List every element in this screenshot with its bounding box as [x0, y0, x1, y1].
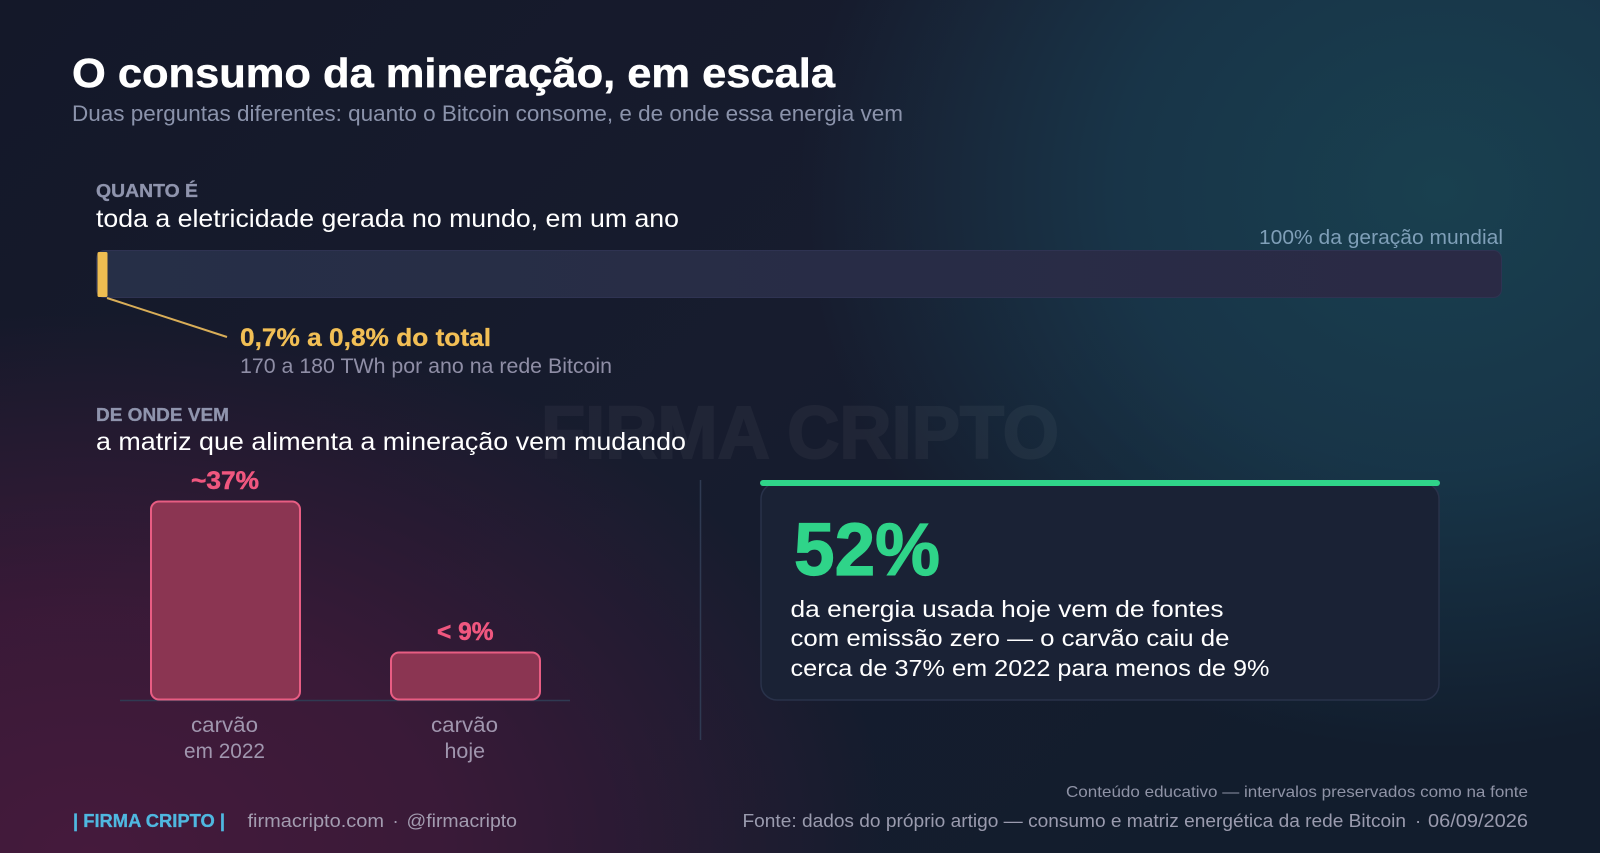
footer links: firmacripto.com [248, 810, 384, 831]
section label: de onde vem: DE ONDE VEM [96, 404, 229, 425]
axis label: in 2022: em 2022 [184, 740, 265, 763]
bar: world generation [96, 250, 1502, 298]
bar: coal 2022 [151, 502, 300, 700]
title: O consumo da mineração, em escala [72, 50, 836, 96]
scale label: 100% da geração mundial [1259, 227, 1503, 249]
disclaimer: Conteúdo educativo — intervalos preservados como na fonte [1066, 784, 1528, 801]
footer links [248, 810, 517, 831]
section heading: energy mix: a matriz que alimenta a mineração vem mudando [96, 428, 686, 456]
axis label: coal 2022: carvão [191, 714, 258, 737]
axis label: today: hoje [444, 740, 485, 763]
big number: 52% [794, 508, 940, 591]
section label: quanto é: QUANTO É [96, 180, 198, 201]
card text [790, 596, 1270, 681]
card accent bar [760, 480, 1440, 486]
footer links: @firmacripto [406, 810, 517, 831]
leader line [107, 298, 227, 337]
footer brand: | FIRMA CRIPTO | [73, 810, 225, 831]
panel: 52% callout card [760, 480, 1440, 700]
axis label: coal today: carvão [431, 714, 498, 737]
value: coal today: < 9% [437, 618, 494, 646]
card text: da energia usada hoje vem de fontes [790, 596, 1224, 622]
bar: coal today [391, 652, 540, 700]
watermark: FIRMA CRIPTO [541, 391, 1059, 474]
card text: com emissão zero — o carvão caiu de [790, 625, 1230, 651]
bar segment: bitcoin share [98, 252, 108, 297]
source and date: 06/09/2026 [1428, 810, 1528, 831]
section heading: world electricity: toda a eletricidade gerada no mundo, em um ano [96, 205, 679, 233]
source and date: Fonte: dados do próprio artigo — consumo e matriz energética da rede Bitcoin [742, 810, 1406, 831]
bar chart: coal share [120, 467, 570, 763]
card body [761, 483, 1439, 700]
source and date: · [1415, 810, 1421, 831]
chart baseline [120, 700, 570, 702]
value: coal 2022: ~37% [191, 467, 259, 495]
footer [73, 784, 1528, 831]
callout: share value: 0,7% a 0,8% do total [240, 324, 491, 352]
panel: de onde vem [96, 404, 686, 763]
panel divider [700, 480, 702, 740]
footer links: · [392, 810, 399, 831]
subtitle: Duas perguntas diferentes: quanto o Bitcoin consome, e de onde essa energia vem [72, 101, 903, 126]
callout: twh range: 170 a 180 TWh por ano na rede Bitcoin [240, 355, 612, 378]
panel: quanto é [96, 180, 1503, 378]
card text: cerca de 37% em 2022 para menos de 9% [790, 655, 1270, 681]
